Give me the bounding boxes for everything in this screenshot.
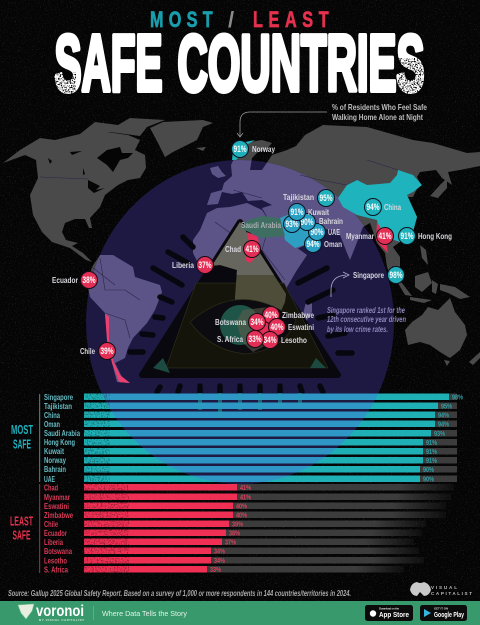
- bar start distress: [84, 393, 110, 482]
- country names: China: [44, 410, 60, 420]
- Liberia: [172, 256, 214, 274]
- bars: [84, 484, 237, 572]
- country names: Hong Kong: [44, 437, 75, 447]
- values: 34%: [214, 556, 225, 565]
- bar start distress: [84, 484, 129, 573]
- tagline: Where Data Tells the Story: [102, 609, 187, 618]
- China: [364, 198, 401, 216]
- values: [423, 392, 463, 484]
- values: 38%: [229, 528, 240, 538]
- sun rays: [130, 237, 352, 392]
- group label: least safe: SAFE: [12, 528, 31, 542]
- group label: most safe: MOST: [11, 422, 33, 437]
- country names: Saudi Arabia: [44, 428, 80, 438]
- highlighted country: Chad: [245, 232, 260, 263]
- source note: Source: Gallup 2025 Global Safety Report. Based on a survey of 1,000 or more respondents in 144 countries/territories in 2024.: [8, 589, 351, 598]
- Hong Kong: [398, 228, 452, 244]
- subtitle: most: MOST: [150, 7, 213, 33]
- Bahrain: [298, 214, 343, 230]
- country names: Oman: [44, 419, 60, 429]
- Kuwait: [288, 204, 329, 220]
- country names: Eswatini: [44, 501, 69, 511]
- Myanmar: 41%: [378, 231, 392, 241]
- legend text line 2: Walking Home Alone at Night: [332, 112, 423, 122]
- UAE: [308, 224, 340, 240]
- map labels: most safe: [232, 140, 452, 284]
- values: 98%: [452, 392, 463, 402]
- Chad: 41%: [246, 244, 258, 254]
- values: 90%: [423, 474, 434, 484]
- values: 41%: [240, 483, 251, 492]
- values: 41%: [240, 492, 251, 502]
- logo text: VISUAL: [431, 585, 457, 590]
- values: 94%: [438, 420, 449, 428]
- Zimbabwe: Zimbabwe: [282, 310, 314, 320]
- Chad: [225, 240, 260, 258]
- values: 91%: [426, 456, 437, 465]
- Google Play button: GET IT ON: [434, 606, 448, 610]
- Myanmar: [346, 228, 394, 244]
- country names: Ecuador: [44, 528, 67, 538]
- App Store button: App Store: [379, 612, 409, 619]
- bar chart: least safe: [10, 482, 454, 574]
- country names: Lesotho: [44, 556, 67, 566]
- country names: Bahrain: [44, 464, 66, 474]
- Eswatini: [268, 318, 314, 336]
- country names: Myanmar: [44, 492, 70, 502]
- values: 95%: [441, 402, 452, 410]
- land inside the circle: [88, 160, 364, 383]
- corner accents: [153, 358, 170, 373]
- highlighted southern Africa: [250, 320, 280, 345]
- outer triangle: [142, 222, 338, 375]
- Ecuador: 38%: [82, 275, 96, 285]
- central circle: [86, 160, 394, 484]
- values: 39%: [232, 520, 243, 528]
- Ecuador: Ecuador: [52, 275, 79, 285]
- Kuwait: Kuwait: [308, 207, 329, 217]
- values: 33%: [210, 565, 221, 574]
- legend text: % of Residents Who Feel Safe: [332, 102, 427, 112]
- country names: Chile: [44, 519, 58, 529]
- subtitle: least: LEAST: [253, 7, 329, 33]
- Google Play button: Google Play: [434, 612, 464, 619]
- values: 91%: [426, 438, 437, 447]
- Saudi Arabia: Saudi Arabia: [241, 220, 281, 230]
- callout arrow: [331, 272, 349, 297]
- callout text: Singapore ranked 1st for the: [327, 306, 405, 315]
- highlighted country: Saudi west: [240, 216, 285, 238]
- Norway: 91%: [234, 144, 246, 154]
- country names: Chad: [44, 482, 58, 492]
- eye triangle: [139, 219, 341, 378]
- title distress: [50, 72, 76, 95]
- Zimbabwe: [262, 306, 314, 324]
- values: 40%: [236, 502, 247, 510]
- bracket line: [39, 484, 40, 573]
- bars: [84, 394, 449, 482]
- Lesotho: Lesotho: [281, 335, 307, 345]
- country names: [44, 482, 73, 574]
- South Africa: S. Africa: [217, 334, 243, 344]
- group label: most safe: SAFE: [13, 436, 31, 452]
- subtitle: slash: /: [228, 7, 234, 32]
- voronoi icon: [18, 604, 34, 619]
- circle overlay on bars: [102, 394, 378, 482]
- tracks: [84, 394, 457, 482]
- UAE: UAE: [328, 227, 340, 237]
- values: 91%: [426, 447, 437, 456]
- Lesotho: [262, 332, 307, 348]
- Bahrain: 90%: [300, 217, 314, 227]
- eye iris: [220, 305, 260, 345]
- callout text line 3: by its low crime rates.: [327, 325, 388, 334]
- voronoi byline: BY VISUAL CAPITALIST: [39, 618, 84, 622]
- Botswana: [215, 314, 266, 330]
- highlighted country: Myanmar: [376, 222, 388, 253]
- Ecuador: [52, 272, 98, 288]
- Oman: [304, 236, 342, 252]
- group label: least safe: [10, 514, 33, 542]
- country names: Zimbabwe: [44, 510, 73, 520]
- values: [210, 483, 251, 574]
- band: [0, 601, 480, 625]
- values: 93%: [434, 429, 445, 438]
- Kuwait: 91%: [290, 207, 304, 217]
- upper grey overlay: [214, 222, 274, 275]
- inner triangle fill: [166, 283, 328, 368]
- legend arrow: [237, 112, 327, 137]
- Myanmar: Myanmar: [346, 231, 375, 241]
- Singapore: Singapore: [353, 270, 384, 280]
- Chile: Chile: [80, 346, 95, 356]
- callout text line 2: 12th consecutive year driven: [327, 315, 406, 324]
- Google Play button: [420, 605, 467, 621]
- Eswatini: Eswatini: [288, 322, 314, 332]
- Oman: Oman: [324, 239, 342, 249]
- bar chart: most safe: [11, 392, 463, 484]
- Zimbabwe: 40%: [264, 310, 278, 320]
- Hudson Bay and lakes: [48, 147, 133, 193]
- eye lens: [190, 299, 296, 354]
- title: [50, 7, 428, 108]
- Chile: [80, 342, 116, 360]
- corner accent right: [310, 358, 326, 368]
- country names: Singapore: [44, 392, 73, 402]
- Bahrain: Bahrain: [319, 216, 343, 226]
- land over eye: [236, 306, 277, 352]
- bracket line: [39, 394, 40, 482]
- country names: Kuwait: [44, 446, 64, 456]
- values: 90%: [423, 465, 434, 474]
- Chile: 39%: [100, 346, 114, 356]
- country names: Norway: [44, 455, 66, 465]
- Lesotho: 34%: [264, 335, 276, 345]
- Saudi Arabia: [241, 216, 300, 232]
- Norway: Norway: [252, 144, 275, 154]
- country names: Liberia: [44, 537, 63, 547]
- Singapore: [353, 266, 404, 284]
- highlighted country: Norway: [232, 140, 255, 160]
- Singapore callout: [327, 272, 406, 334]
- App Store button: [365, 605, 413, 621]
- legend annotation: [237, 102, 427, 137]
- values: 94%: [438, 410, 449, 420]
- App Store button: Download on the: [379, 606, 399, 610]
- Singapore: 98%: [390, 270, 402, 280]
- country names: Botswana: [44, 546, 72, 556]
- title distress right: [398, 58, 428, 95]
- Oman: 94%: [306, 239, 320, 249]
- country names: [44, 392, 80, 484]
- values: 34%: [214, 546, 225, 556]
- Tajikistan: Tajikistan: [283, 192, 314, 202]
- Tajikistan: [283, 190, 334, 206]
- highlighted country: China: [338, 170, 422, 242]
- China: China: [384, 202, 401, 212]
- South Africa: 33%: [248, 334, 262, 344]
- logo mark: [410, 582, 431, 596]
- ray ghosts on bars: [200, 393, 300, 418]
- logo text line 2: CAPITALIST: [431, 591, 472, 596]
- Hong Kong: Hong Kong: [418, 231, 452, 241]
- Saudi Arabia: 93%: [286, 219, 298, 229]
- country names: S. Africa: [44, 564, 68, 574]
- country names: UAE: [44, 474, 55, 484]
- headline: safe: SAFE: [54, 18, 162, 108]
- world map: [3, 118, 480, 484]
- border lines: [40, 160, 398, 338]
- footer band: [0, 601, 480, 625]
- Botswana: Botswana: [215, 317, 246, 327]
- map labels: least safe: [52, 228, 394, 360]
- China: 94%: [366, 202, 380, 212]
- Liberia: 37%: [198, 260, 212, 270]
- Norway: [232, 140, 275, 158]
- group label: least safe: LEAST: [10, 514, 33, 528]
- highlighted country: Chile: [105, 313, 130, 383]
- Chad: Chad: [225, 244, 241, 254]
- voronoi wordmark: voronoi: [36, 603, 84, 620]
- land outside the circle: [3, 118, 480, 383]
- South Africa: [217, 330, 264, 348]
- Visual Capitalist logo: [410, 582, 472, 596]
- Eswatini: 40%: [270, 322, 284, 332]
- Botswana: 34%: [250, 317, 264, 327]
- country names: Tajikistan: [44, 401, 72, 411]
- tracks: [84, 484, 454, 572]
- africa inside triangle: [214, 222, 286, 310]
- group label: most safe: [11, 422, 33, 452]
- values: 40%: [236, 510, 247, 520]
- highlighted countries: Gulf states: [280, 214, 312, 248]
- divider: [92, 606, 95, 620]
- UAE: 90%: [310, 227, 324, 237]
- Tajikistan: 95%: [320, 193, 332, 203]
- values: 37%: [225, 538, 236, 546]
- Liberia: Liberia: [172, 260, 194, 270]
- Hong Kong: 91%: [400, 231, 414, 241]
